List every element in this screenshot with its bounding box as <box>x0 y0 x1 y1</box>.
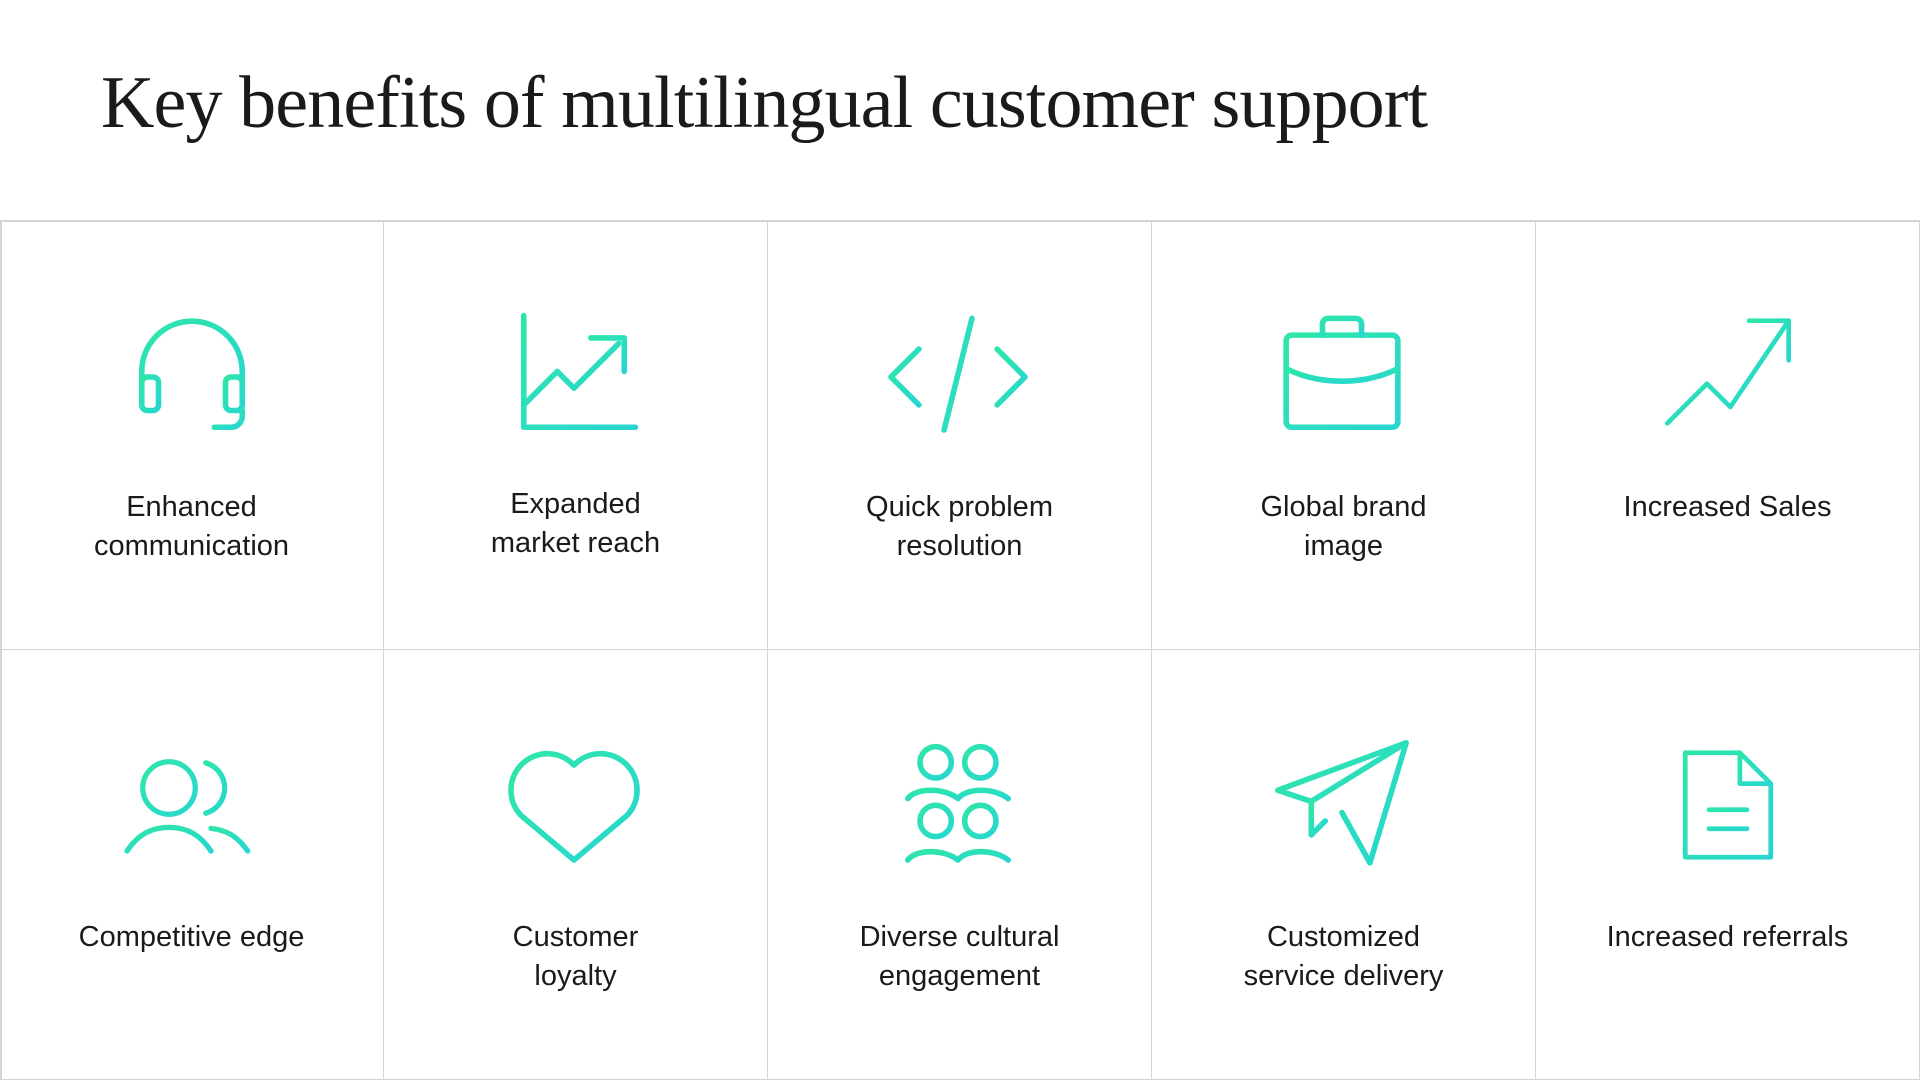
icon: chart <box>520 312 638 430</box>
label <box>94 491 289 562</box>
label: communication <box>94 530 289 562</box>
panel: global brand image <box>1152 220 1536 650</box>
label <box>491 488 660 559</box>
panel: expanded market reach <box>384 220 768 650</box>
grid of benefits <box>0 220 1920 1080</box>
label: Customized <box>1267 921 1420 953</box>
panel: increased referrals <box>1536 650 1920 1080</box>
label: Expanded <box>510 488 641 520</box>
panel: quick problem resolution <box>768 220 1152 650</box>
label: Competitive edge <box>79 921 304 953</box>
label: engagement <box>879 960 1040 992</box>
icon: trending up <box>1665 318 1791 426</box>
label <box>1244 921 1444 992</box>
icon: heart <box>508 750 640 863</box>
label: Enhanced <box>126 491 257 523</box>
label: image <box>1304 530 1383 562</box>
label: Global brand <box>1260 491 1427 523</box>
icon: briefcase <box>1283 316 1401 430</box>
icon: users <box>124 759 250 854</box>
label <box>513 921 638 992</box>
panel: enhanced communication <box>0 220 384 650</box>
icon: group <box>905 744 1011 863</box>
panel: diverse cultural engagement <box>768 650 1152 1080</box>
icon: code <box>888 316 1028 433</box>
icon: document <box>1682 750 1774 860</box>
label: loyalty <box>534 960 617 992</box>
panel: increased sales <box>1536 220 1920 650</box>
panel: competitive edge <box>0 650 384 1080</box>
icon: headset <box>138 318 246 430</box>
panel: customized service delivery <box>1152 650 1536 1080</box>
label: Quick problem <box>866 491 1053 523</box>
label: Diverse cultural <box>860 921 1059 953</box>
label: service delivery <box>1244 960 1443 992</box>
title: Key benefits of multilingual customer support <box>101 62 1427 144</box>
label <box>860 921 1059 992</box>
label: market reach <box>491 527 660 559</box>
panel: customer loyalty <box>384 650 768 1080</box>
label: Increased Sales <box>1624 491 1831 523</box>
label: Increased referrals <box>1607 921 1848 953</box>
label <box>1260 491 1427 562</box>
icon: paper plane <box>1275 740 1409 866</box>
label: resolution <box>897 530 1022 562</box>
label: Customer <box>513 921 638 953</box>
label <box>866 491 1053 562</box>
